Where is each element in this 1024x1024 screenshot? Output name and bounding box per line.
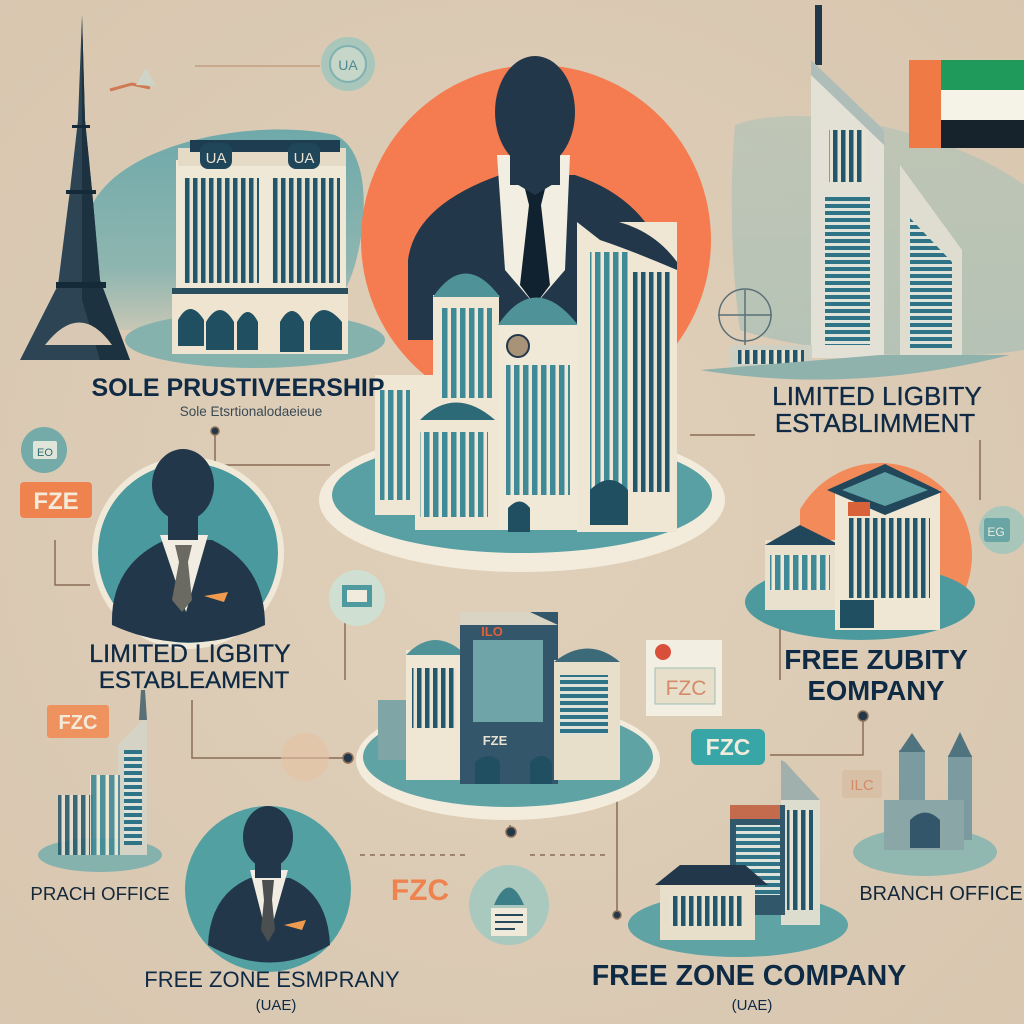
tag: FZE: FZE [33, 488, 79, 515]
label: free zone bottom left [144, 967, 400, 1014]
icon: small document left [329, 570, 385, 626]
icon: Burj tower left [20, 15, 130, 360]
panel: central buildings island [319, 218, 725, 572]
panel: bottom left businessman [185, 806, 351, 972]
icon: document circle [469, 865, 549, 945]
tag: FZC left orange [47, 705, 109, 738]
panel: sole proprietorship building: UA [206, 150, 226, 167]
panel: branch office right [842, 732, 997, 876]
label: limited liability establishment top right: LIMITED LIGBITY [772, 381, 982, 411]
label: free zone company right: EOMPANY [807, 675, 945, 706]
label: limited liability mid left: ESTABLEAMENT [99, 667, 289, 694]
icon: document card [646, 640, 722, 716]
icon: small right badge [979, 506, 1024, 554]
panel: bottom right buildings [628, 760, 848, 957]
decoration: top connector icon [110, 37, 375, 91]
label: sole proprietorship [91, 374, 385, 419]
panel: center lower buildings [356, 612, 660, 820]
panel: building right [745, 463, 975, 647]
label: branch office right: BRANCH OFFICE [859, 883, 1023, 905]
teal backdrop: right [732, 116, 1024, 356]
central businessman [408, 56, 668, 340]
panel: center lower buildings: ILO [481, 624, 503, 639]
central orange sun [361, 65, 711, 415]
panel: branch office right: ILC [850, 777, 874, 794]
label: free zone company bottom: (UAE) [732, 997, 772, 1014]
label: free zone company bottom [592, 960, 906, 1014]
label: branch office left: PRACH OFFICE [30, 883, 170, 904]
tag: FZC teal [691, 729, 765, 765]
connector lines [55, 427, 980, 919]
label: limited liability establishment top right: ESTABLIMMENT [775, 408, 975, 438]
decoration: top connector icon: UA [338, 57, 358, 73]
panel: left businessman [92, 449, 284, 649]
label: sole proprietorship: SOLE PRUSTIVEERSHIP [91, 374, 385, 402]
panel: sole proprietorship building [125, 140, 385, 368]
label: sole proprietorship: Sole Etsrtionalodaeieue [180, 404, 322, 419]
icon: small left camera [21, 427, 67, 473]
icon: small right badge: EG [987, 525, 1005, 539]
icon: small left camera: EO [37, 447, 53, 459]
tag: FZE [20, 482, 92, 518]
label: free zone company bottom: FREE ZONE COMPANY [592, 960, 906, 992]
panel: center lower buildings: FZE [483, 733, 508, 748]
label: limited liability mid left: LIMITED LIGBITY [89, 640, 291, 668]
icon: UAE flag [909, 60, 1024, 148]
tag: FZC teal: FZC [706, 734, 750, 760]
tag: FZC bottom: FZC [391, 874, 449, 907]
icon: emirates towers right [700, 5, 1010, 380]
tag: FZC left orange: FZC [59, 712, 97, 734]
panel: sole proprietorship building: UA [294, 150, 314, 167]
label: limited liability mid left [89, 640, 291, 694]
left tower [375, 375, 435, 515]
label: free zone company right [784, 644, 968, 706]
teal backdrop: left [90, 129, 364, 330]
label: free zone company right: FREE ZUBITY [784, 644, 968, 675]
label: free zone bottom left: FREE ZONE ESMPRANY [144, 967, 400, 992]
label: free zone bottom left: (UAE) [256, 997, 296, 1014]
panel: branch office left [38, 690, 162, 872]
label: limited liability establishment top right [772, 381, 982, 438]
icon: document card: FZC [666, 677, 706, 700]
